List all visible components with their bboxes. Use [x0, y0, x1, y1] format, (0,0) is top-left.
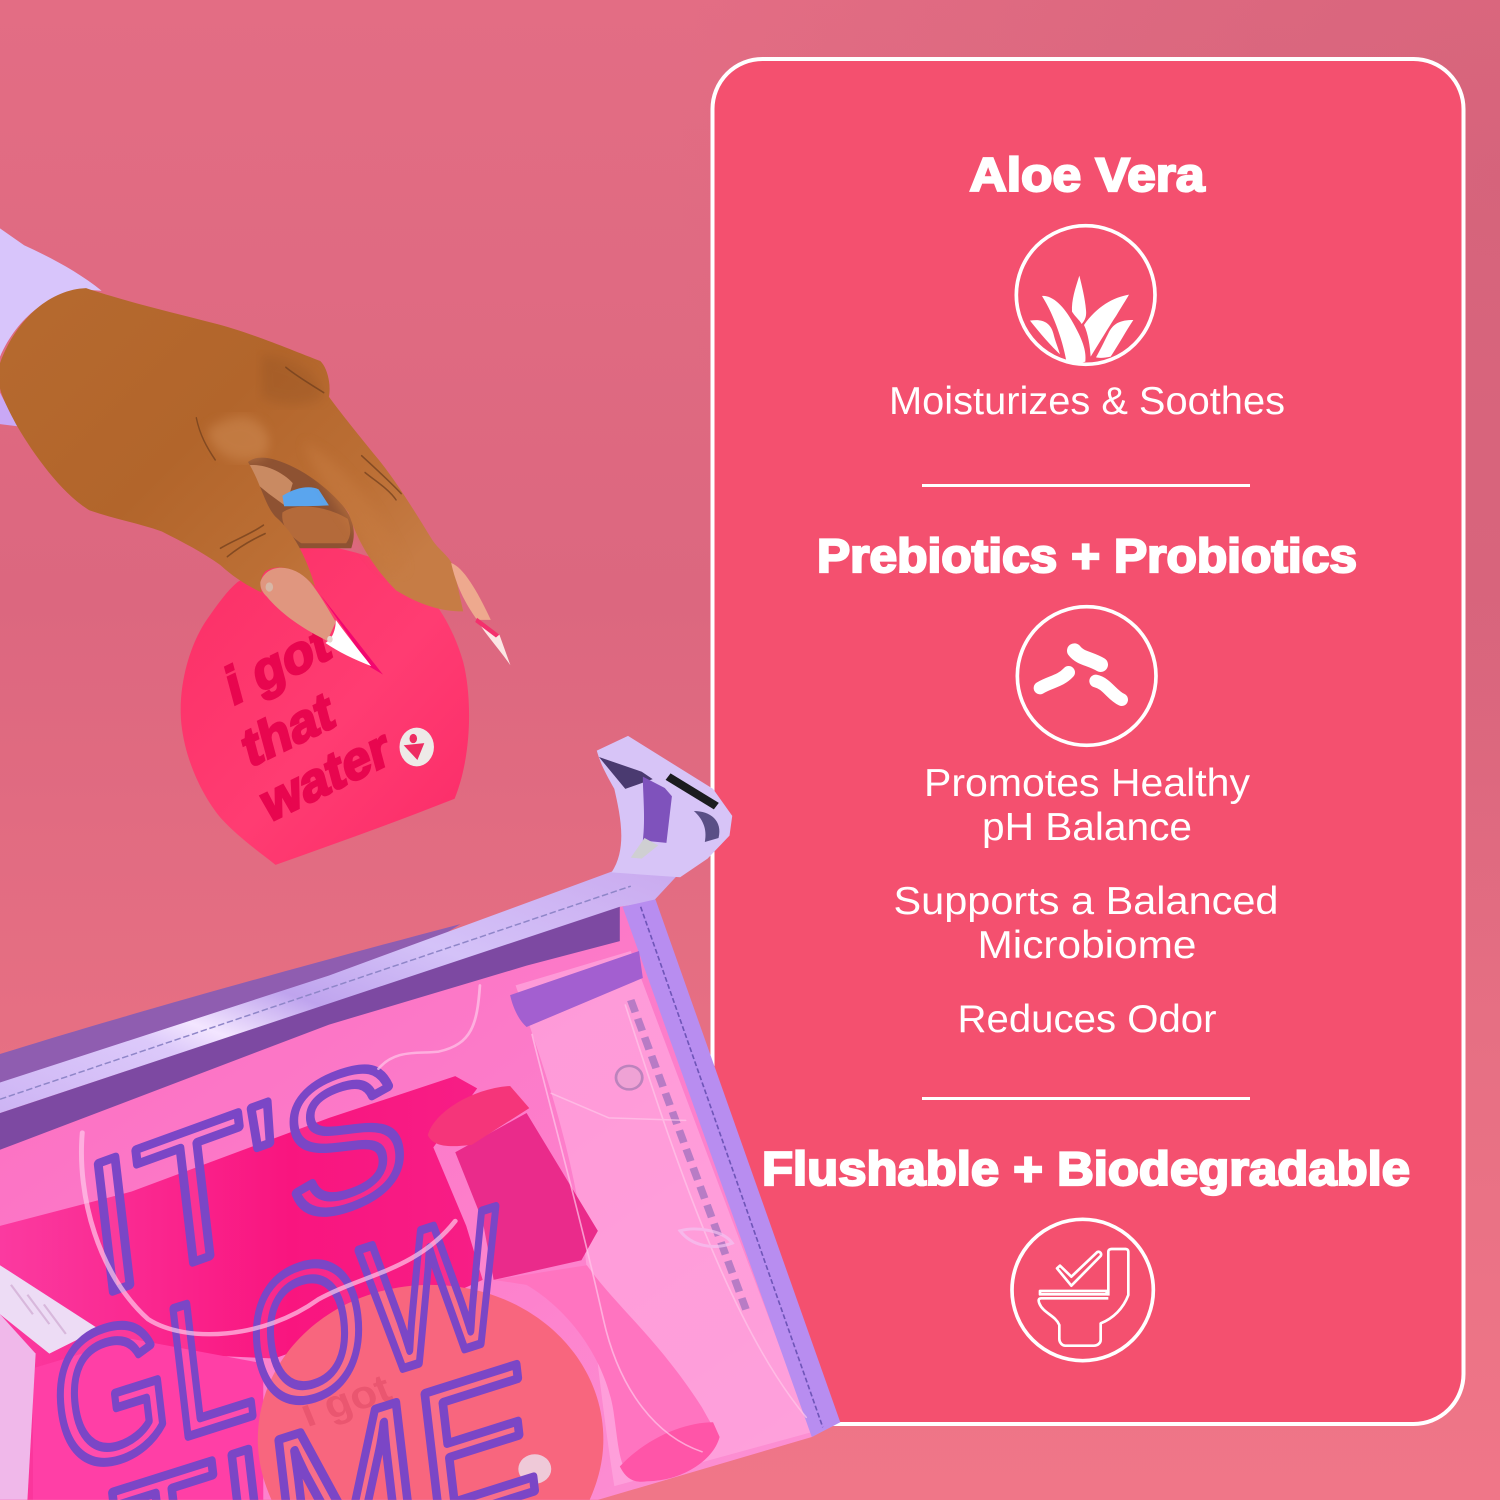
text: Supports a Balanced Microbiome: Supports a Balanced — [894, 880, 1278, 923]
text: Promotes Healthy pH Balance: Promotes Healthy — [924, 762, 1251, 805]
zipper tab — [597, 736, 732, 877]
index finger nail — [451, 563, 510, 665]
purple loop — [510, 951, 643, 1027]
sleeve — [0, 228, 102, 426]
inner finger area — [220, 448, 354, 548]
sachet wording: i got — [220, 612, 336, 718]
clear right area — [516, 951, 812, 1486]
zipper tape — [0, 906, 620, 1150]
panel card — [712, 59, 1464, 1424]
sachet wording: water — [255, 717, 396, 835]
sachet wording — [220, 612, 396, 835]
hot pink inner pouch — [0, 1076, 483, 1500]
icon: aloe plant — [1016, 226, 1155, 364]
heading: Prebiotics + Probiotics: Prebiotics + Probiotics — [817, 529, 1357, 582]
icon: bacteria — [1017, 607, 1156, 745]
sachet inside pouch: i got — [293, 1365, 398, 1435]
thumb nail — [260, 568, 383, 675]
photo: holographic pouch — [0, 736, 840, 1500]
sachet logo — [400, 728, 434, 766]
text: Reduces Odor: Reduces Odor — [958, 998, 1217, 1041]
text: Moisturizes & Soothes: Moisturizes & Soothes — [889, 380, 1285, 423]
razor — [0, 1265, 99, 1500]
hand shading — [196, 355, 406, 569]
back binding — [0, 924, 461, 1091]
bottle — [428, 1086, 720, 1482]
photo: hand holding sachet — [0, 228, 510, 865]
plastic highlights — [81, 985, 806, 1452]
heading: Aloe Vera: Aloe Vera — [970, 148, 1205, 201]
pouch wording — [56, 1064, 539, 1500]
sachet inside pouch — [258, 1285, 603, 1500]
icon: toilet with check mark — [1012, 1219, 1153, 1361]
text: Promotes Healthy pH Balance: pH Balance — [982, 806, 1192, 849]
pouch body — [0, 902, 839, 1500]
right edge binding — [623, 899, 840, 1437]
text: Supports a Balanced Microbiome: Microbiome — [978, 924, 1196, 967]
heading: Flushable + Biodegradable: Flushable + Biodegradable — [762, 1142, 1410, 1195]
pouch wording: IT'S — [77, 1015, 416, 1337]
sachet wording: that — [237, 680, 339, 780]
top holographic binding — [0, 863, 680, 1113]
text: Promotes Healthy pH Balance — [924, 762, 1251, 849]
sachet — [181, 543, 469, 865]
hand and fingers — [0, 288, 463, 611]
panel: benefits — [712, 59, 1464, 1424]
text: Supports a Balanced Microbiome — [894, 880, 1278, 967]
